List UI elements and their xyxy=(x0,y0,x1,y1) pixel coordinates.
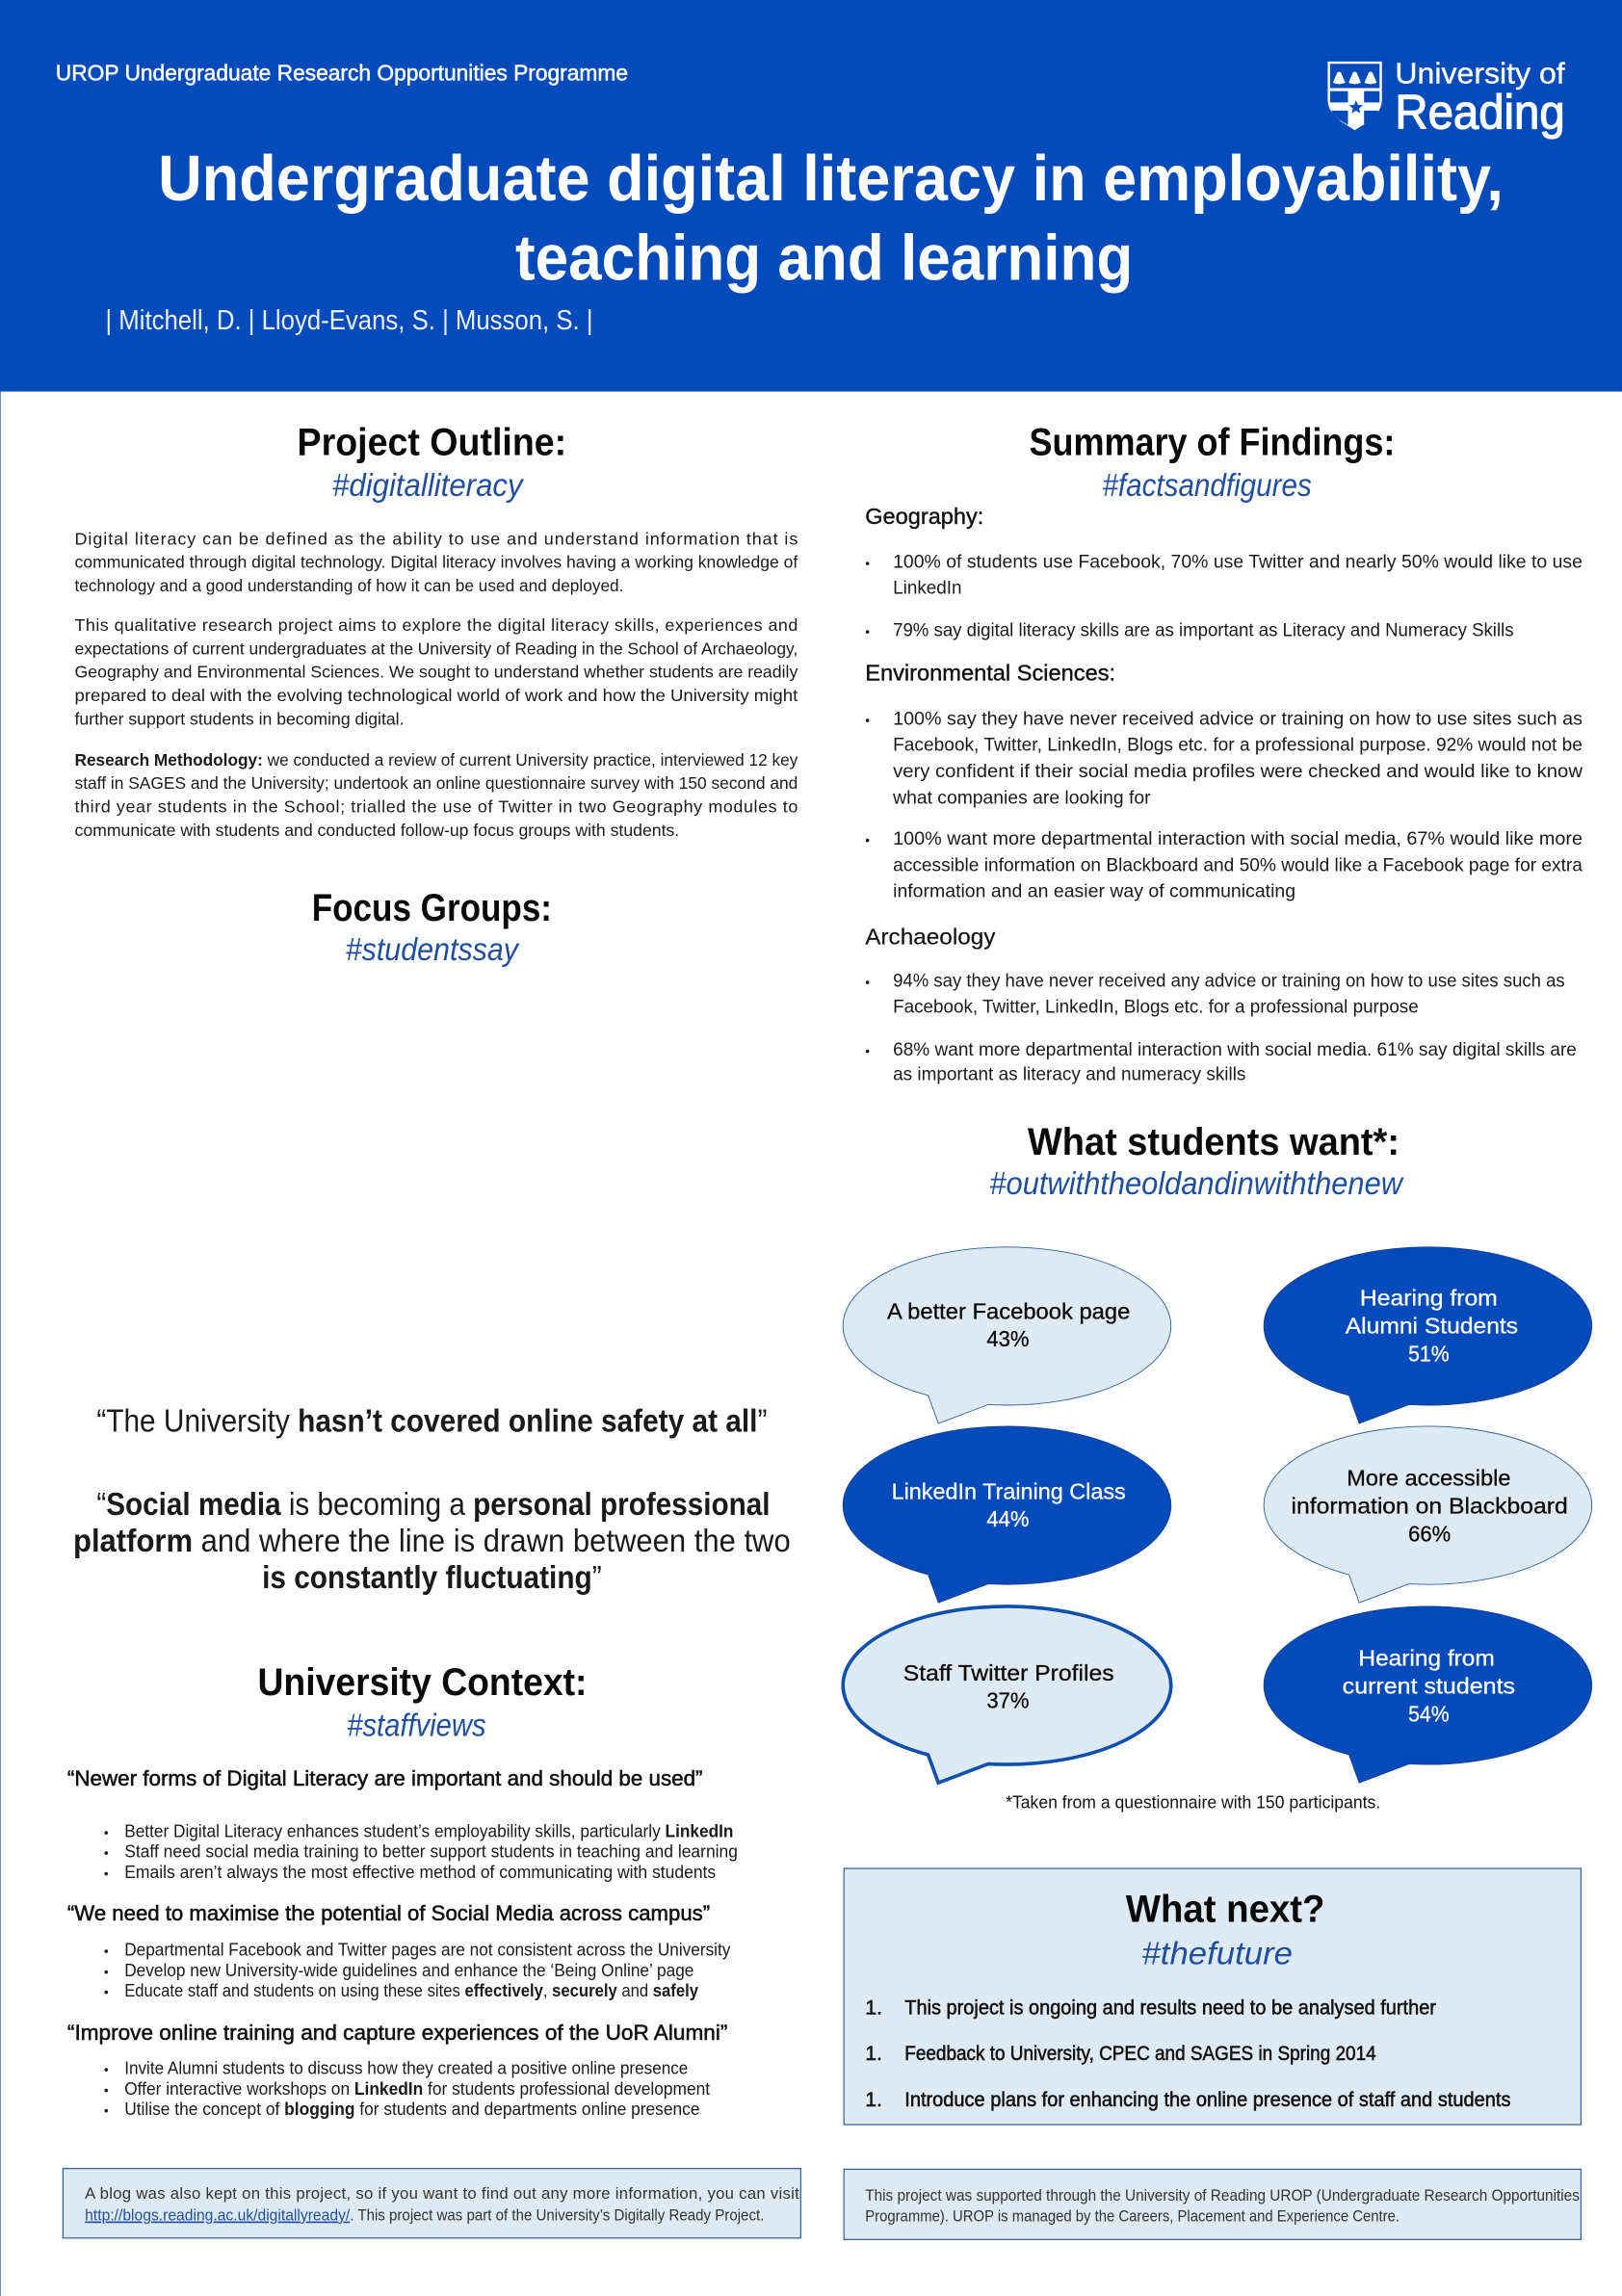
panel: project outline xyxy=(75,422,798,840)
text block: research methodology: third year students in the School; trialled the use of Twitter in two Geography modules to xyxy=(75,797,798,817)
bullet list 1: • xyxy=(104,1825,109,1839)
text block: aims: expectations of current undergraduates at the University of Reading in the School of Archaeology, xyxy=(75,639,798,658)
section: archaeology: 94% say they have never received any advice or training on how to use sites such as xyxy=(893,970,1565,991)
speech bubble: current students 54% xyxy=(1264,1606,1592,1783)
section: environmental sciences: accessible information on Blackboard and 50% would like a Facebook page for extra xyxy=(893,854,1583,875)
quote: online safety: “The University hasn’t covered online safety at all” xyxy=(96,1403,767,1439)
hashtag: digitalliteracy: #digitalliteracy xyxy=(332,468,525,504)
section: environmental sciences: Facebook, Twitter, LinkedIn, Blogs etc. for a professional purpose. 92% would not be xyxy=(893,735,1583,756)
section: geography xyxy=(865,504,1583,640)
bullet list 2: Departmental Facebook and Twitter pages are not consistent across the University xyxy=(124,1939,731,1959)
hashtag: studentssay: #studentssay xyxy=(346,932,520,968)
text block: aims: prepared to deal with the evolving technological world of work and how the University might xyxy=(75,686,798,705)
section: environmental sciences xyxy=(865,661,1583,902)
bullet list 3 xyxy=(104,2058,711,2119)
bullet list 1: Emails aren’t always the most effective method of communicating with students xyxy=(124,1862,716,1882)
heading: what students want: What students want*: xyxy=(1028,1121,1400,1163)
speech bubble: current students 54%: current students xyxy=(1343,1673,1515,1698)
quote: social media xyxy=(73,1487,791,1596)
speech bubble: Blackboard 66% xyxy=(1264,1426,1592,1603)
speech bubble: LinkedIn training 44%: LinkedIn Training Class xyxy=(892,1478,1126,1503)
speech bubble: Blackboard 66%: information on Blackboard xyxy=(1292,1494,1568,1519)
section: archaeology: • xyxy=(865,1044,870,1058)
text block: definition: Digital literacy can be defined as the ability to use and understand information that is xyxy=(75,529,798,548)
icon: shield crest xyxy=(1327,62,1382,130)
hashtag: factsandfigures: #factsandfigures xyxy=(1102,468,1312,504)
bullet list 1: • xyxy=(104,1846,109,1861)
section: environmental sciences: Environmental Sciences: xyxy=(865,661,1115,686)
section: archaeology xyxy=(865,924,1577,1085)
hashtag: outwiththeoldandinwiththenew: #outwiththeoldandinwiththenew xyxy=(989,1166,1404,1202)
section: geography: 100% of students use Facebook, 70% use Twitter and nearly 50% would like to use xyxy=(893,552,1583,573)
speech bubble: staff Twitter 37%: Staff Twitter Profiles xyxy=(903,1660,1114,1685)
numbered list: 1. xyxy=(865,2042,882,2065)
staff quote 1: “Newer forms of Digital Literacy are important and should be used” xyxy=(67,1766,703,1790)
section: geography: 79% say digital literacy skills are as important as Literacy and Numeracy Skills xyxy=(893,619,1514,640)
text block: aims xyxy=(75,615,798,728)
numbered list: 1. xyxy=(865,1996,882,2019)
text block: research methodology: communicate with students and conducted follow-up focus groups with students. xyxy=(75,821,679,840)
bullet list 1: • xyxy=(104,1866,109,1881)
section: geography: Geography: xyxy=(865,504,983,529)
title xyxy=(158,143,1504,294)
speech bubble: hearing from alumni 51%: 51% xyxy=(1408,1341,1450,1366)
numbered list: 1. xyxy=(865,2088,882,2111)
panel: summary of findings xyxy=(865,422,1583,1085)
callout: blog note: . This project was part of the University’s Digitally Ready Project. xyxy=(350,2206,764,2225)
numbered list: Introduce plans for enhancing the online presence of staff and students xyxy=(904,2088,1510,2111)
panel: focus groups xyxy=(73,887,791,1596)
header banner xyxy=(0,0,1622,392)
bullet list 2 xyxy=(104,1939,731,2000)
logo: University of Reading xyxy=(1327,58,1565,140)
footnote: *Taken from a questionnaire with 150 participants. xyxy=(1006,1792,1380,1813)
speech bubble: hearing from alumni 51%: Hearing from xyxy=(1360,1286,1498,1311)
heading: project outline: Project Outline: xyxy=(298,422,566,464)
panel: what next xyxy=(844,1868,1581,2125)
callout: blog note: http://blogs.reading.ac.uk/digitallyready/ xyxy=(85,2206,351,2225)
numbered list: This project is ongoing and results need to be analysed further xyxy=(904,1996,1436,2019)
bullet list 3: • xyxy=(104,2063,109,2077)
bullet list 1 xyxy=(104,1820,738,1882)
section: archaeology: as important as literacy and numeracy skills xyxy=(893,1064,1246,1085)
section: archaeology: Facebook, Twitter, LinkedIn, Blogs etc. for a professional purpose xyxy=(893,997,1419,1018)
bullet list 3: Offer interactive workshops on LinkedIn for students professional development xyxy=(124,2078,711,2099)
bullet list 3: • xyxy=(104,2103,109,2118)
speech bubble: hearing from alumni 51%: Alumni Students xyxy=(1346,1314,1518,1339)
section: environmental sciences: what companies are looking for xyxy=(892,787,1151,808)
text block: research methodology: Research Methodology: we conducted a review of current University practice, interviewed 12 key xyxy=(75,750,798,770)
bullet list 2: Develop new University-wide guidelines and enhance the ‘Being Online’ page xyxy=(124,1960,693,1980)
speech bubble: current students 54%: 54% xyxy=(1408,1701,1450,1726)
speech bubble: staff Twitter 37%: 37% xyxy=(986,1688,1030,1713)
text block: aims: This qualitative research project aims to explore the digital literacy skills, experiences and xyxy=(75,615,798,635)
bullet list 3: Utilise the concept of blogging for students and departments online presence xyxy=(124,2099,699,2119)
speech bubble: staff Twitter 37% xyxy=(843,1606,1171,1783)
text block: aims: Geography and Environmental Sciences. We sought to understand whether students are readily xyxy=(75,663,798,682)
section: archaeology: Archaeology xyxy=(865,924,996,949)
speech bubble: LinkedIn training 44% xyxy=(843,1426,1171,1603)
bullet list 3: • xyxy=(104,2083,109,2098)
speech bubble: Blackboard 66%: More accessible xyxy=(1347,1466,1510,1491)
speech bubble: LinkedIn training 44%: 44% xyxy=(986,1506,1030,1531)
callout: acknowledgement: Programme). UROP is managed by the Careers, Placement and Experience Centre. xyxy=(865,2206,1400,2225)
numbered list xyxy=(865,1996,1510,2111)
section: environmental sciences: very confident if their social media profiles were checked and would like to know xyxy=(893,761,1583,782)
panel: university context xyxy=(67,1661,738,2119)
section: environmental sciences: 100% want more departmental interaction with social media, 67% would like more xyxy=(893,828,1583,849)
section: geography: • xyxy=(865,624,870,639)
section: geography: LinkedIn xyxy=(893,577,962,598)
heading: what next: What next? xyxy=(1126,1889,1324,1931)
numbered list: Feedback to University, CPEC and SAGES in Spring 2014 xyxy=(904,2042,1376,2065)
section: geography: • xyxy=(865,557,870,571)
text block: aims: further support students in becoming digital. xyxy=(75,709,404,728)
heading: summary of findings: Summary of Findings: xyxy=(1029,422,1395,464)
section: archaeology: 68% want more departmental interaction with social media. 61% say digital skills are xyxy=(893,1039,1577,1060)
speech bubble: better Facebook page 43%: A better Facebook page xyxy=(887,1298,1130,1323)
text block: research methodology xyxy=(75,750,798,840)
text block: definition: communicated through digital technology. Digital literacy involves having a working knowledge of xyxy=(75,553,798,572)
heading: university context: University Context: xyxy=(258,1661,587,1704)
hashtag: thefuture: #thefuture xyxy=(1141,1937,1293,1972)
speech bubble: better Facebook page 43%: 43% xyxy=(986,1326,1030,1351)
bullet list 2: • xyxy=(104,1944,109,1958)
section: environmental sciences: 100% say they have never received advice or training on how to use sites such as xyxy=(893,708,1583,729)
programme name: UROP Undergraduate Research Opportunities Programme xyxy=(56,61,628,86)
section: archaeology: • xyxy=(865,975,870,989)
text block: definition xyxy=(75,529,798,595)
quote: social media: “Social media is becoming a personal professional xyxy=(96,1487,770,1523)
staff quote 3: “Improve online training and capture experiences of the UoR Alumni” xyxy=(67,2021,727,2045)
quote: social media: is constantly fluctuating” xyxy=(262,1560,602,1596)
hashtag: staffviews: #staffviews xyxy=(347,1709,486,1744)
title: teaching and learning xyxy=(515,222,1133,294)
section: environmental sciences: • xyxy=(865,833,870,848)
section: environmental sciences: • xyxy=(865,713,870,727)
staff quote 2: “We need to maximise the potential of Social Media across campus” xyxy=(67,1901,710,1925)
callout: acknowledgement: This project was supported through the University of Reading UROP (Undergraduate Research Opportunities xyxy=(865,2186,1580,2205)
callout: blog note: A blog was also kept on this project, so if you want to find out any more information, you can visit xyxy=(85,2184,799,2203)
panel: what students want xyxy=(843,1121,1592,1813)
speech bubble: hearing from alumni 51% xyxy=(1264,1247,1592,1423)
text block: research methodology: staff in SAGES and the University; undertook an online questionnaire survey with 150 second and xyxy=(75,773,798,793)
bullet list 3: Invite Alumni students to discuss how they created a positive online presence xyxy=(124,2058,688,2078)
bullet list 1: Staff need social media training to better support students in teaching and learning xyxy=(124,1841,738,1862)
speech bubble: better Facebook page 43% xyxy=(843,1247,1171,1423)
speech bubble: Blackboard 66%: 66% xyxy=(1408,1521,1451,1546)
logo: University of Reading: Reading xyxy=(1395,86,1565,140)
logo: University of Reading: University of xyxy=(1395,58,1565,91)
callout: acknowledgement xyxy=(844,2169,1581,2239)
speech bubble: current students 54%: Hearing from xyxy=(1358,1646,1495,1671)
title: Undergraduate digital literacy in employability, xyxy=(158,143,1504,215)
text block: definition: technology and a good understanding of how it can be used and deployed. xyxy=(75,576,623,595)
callout: blog note xyxy=(63,2169,800,2238)
authors: | Mitchell, D. | Lloyd-Evans, S. | Musson, S. | xyxy=(105,305,593,336)
bullet list 2: Educate staff and students on using these sites effectively, securely and safely xyxy=(124,1980,698,2000)
heading: focus groups: Focus Groups: xyxy=(312,887,552,929)
bullet list 2: • xyxy=(104,1965,109,1979)
quote: social media: platform and where the line is drawn between the two xyxy=(73,1524,791,1559)
bullet list 2: • xyxy=(104,1985,109,1999)
bullet list 1: Better Digital Literacy enhances student’s employability skills, particularly LinkedIn xyxy=(124,1820,733,1840)
section: environmental sciences: information and an easier way of communicating xyxy=(893,881,1295,902)
